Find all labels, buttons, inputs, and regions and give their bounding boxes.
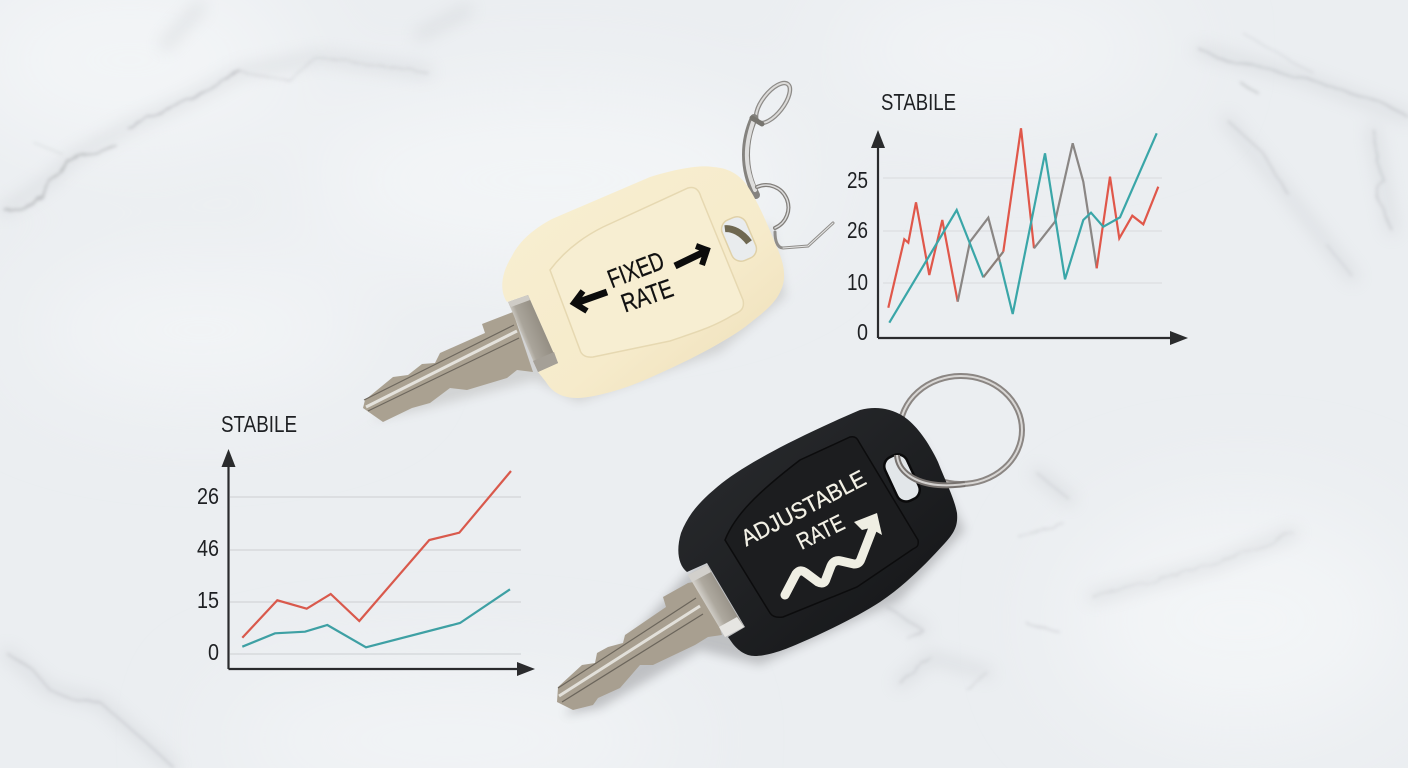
volatile data lines (888, 128, 1158, 323)
icon: left arrow (574, 291, 607, 311)
chart title: STABILE (881, 89, 956, 115)
chart: bottom left rising line chart (197, 411, 535, 676)
y axis labels: 10 (847, 269, 868, 295)
label: fixed rate (603, 245, 677, 318)
key: adjustable rate (black) (557, 376, 1022, 715)
key fob body (502, 166, 784, 398)
y axis labels (197, 483, 219, 665)
key hole (881, 451, 923, 505)
metal collar (688, 565, 744, 637)
axes (871, 130, 1188, 345)
label: adjustable rate: RATE (792, 509, 849, 554)
y axis labels: 25 (847, 167, 868, 193)
y axis labels: 26 (197, 483, 219, 509)
y axis labels: 26 (847, 217, 868, 243)
y axis labels: 15 (197, 587, 219, 613)
axes (222, 449, 535, 676)
key fob body (678, 408, 957, 656)
y axis labels (847, 167, 868, 345)
key ring (900, 376, 1022, 484)
y axis labels: 0 (857, 319, 868, 345)
key blade (363, 312, 533, 422)
key blade (557, 580, 722, 710)
y axis labels: 0 (208, 639, 219, 665)
chart title: STABILE (221, 411, 297, 437)
label: fixed rate: RATE (617, 273, 677, 318)
key: fixed rate (cream) (363, 78, 833, 422)
metal collar (508, 295, 558, 372)
red line (242, 471, 511, 638)
icon: right arrow (675, 246, 707, 266)
key rings and wire (746, 78, 833, 248)
shadow (565, 440, 965, 715)
icon: squiggly rising arrow (785, 513, 882, 595)
fob inset panel (550, 187, 743, 357)
teal line (242, 589, 510, 647)
label: fixed rate: FIXED (603, 245, 668, 294)
shadow (372, 225, 786, 420)
key hole (718, 214, 760, 264)
chart: top right volatile line chart (847, 89, 1188, 345)
y axis labels: 46 (197, 535, 219, 561)
ring through hole (897, 455, 965, 485)
label: adjustable rate: ADJUSTABLE (737, 465, 870, 551)
fob inset panel (725, 437, 918, 617)
